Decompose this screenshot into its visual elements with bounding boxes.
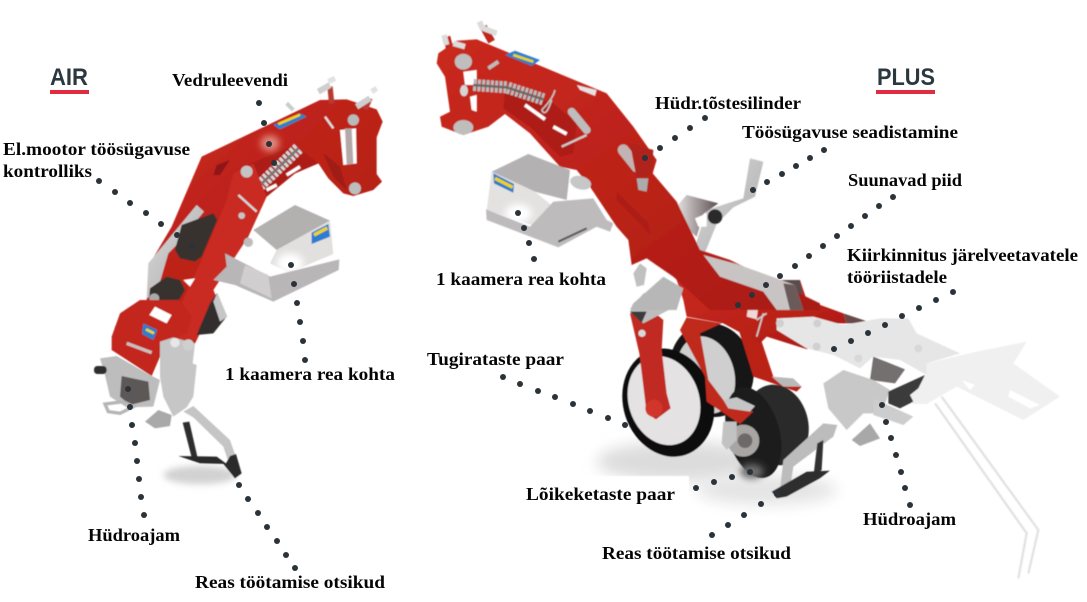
callout: Kiirkinnitus: tööriistadele: [847, 267, 947, 287]
machine: PLUS row unit: [437, 22, 1060, 578]
white rear frame: [777, 317, 960, 375]
callout: 1 kaamera rea kohta (AIR): [225, 262, 395, 384]
heading: PLUS: PLUS: [877, 64, 935, 91]
cutting discs: [737, 379, 816, 471]
callout: Töösügavuse seadistamine: Töösügavuse seadistamine: [742, 122, 958, 142]
callout: Lõikeketaste paar: [526, 469, 753, 504]
leg bracket: [633, 263, 647, 287]
head silver parts: [348, 114, 359, 126]
callout: Vedruleevendi: [172, 70, 288, 166]
ground shadow: [597, 442, 837, 505]
silver pins: [455, 54, 472, 70]
callout: Suunavad piid: Suunavad piid: [848, 170, 962, 190]
callout: Suunavad piid: [735, 170, 962, 308]
callout: Hüdr.tõstesilinder: Hüdr.tõstesilinder: [655, 93, 801, 113]
callout: 1 kaamera rea kohta (PLUS): 1 kaamera rea kohta: [436, 269, 606, 289]
machine: AIR row unit: [94, 78, 383, 484]
callout: 1 kaamera rea kohta (AIR): 1 kaamera rea kohta: [225, 364, 395, 384]
callout: Hüdroajam (AIR): [88, 386, 180, 545]
callout: Reas töötamise otsikud (AIR): Reas töötamise otsikud: [195, 572, 385, 592]
rear bracket: [197, 293, 227, 335]
callout: Töösügavuse seadistamine: [742, 122, 958, 193]
callout: Kiirkinnitus: [831, 245, 1078, 352]
callout: El.mootor: [3, 139, 195, 249]
arm and share: [780, 423, 837, 490]
spring: [473, 85, 543, 99]
callout: Hüdroajam (PLUS): Hüdroajam: [863, 509, 956, 529]
callout: Reas töötamise otsikud (AIR): [195, 482, 385, 592]
callout: Tugirataste paar: Tugirataste paar: [427, 349, 564, 369]
middle red leg: [680, 317, 753, 424]
main red frame: [437, 39, 820, 310]
lower arm and share: [183, 406, 242, 478]
callout: Kiirkinnitus: Kiirkinnitus järelveetavatele: [847, 245, 1078, 265]
callout: Lõikeketaste paar: Lõikeketaste paar: [526, 484, 675, 504]
lower grey mount: [160, 337, 197, 417]
callout: Vedruleevendi: Vedruleevendi: [172, 70, 288, 90]
red tail of beam: [677, 280, 847, 349]
right red leg: [737, 323, 802, 392]
callout: Hüdr.tõstesilinder: [642, 93, 801, 161]
back wheel: [659, 313, 764, 427]
front wheel: [609, 336, 728, 469]
wires: [935, 403, 1027, 578]
camera box: [253, 205, 330, 250]
front red leg: [630, 312, 671, 419]
callout: Hüdroajam (AIR): Hüdroajam: [88, 525, 180, 545]
heading: AIR: AIR: [50, 64, 88, 91]
head windows: [463, 70, 477, 112]
callout: El.mootor: kontrolliks: [3, 161, 92, 181]
callout: 1 kaamera rea kohta (PLUS): [436, 210, 606, 289]
gray plate and motors: [147, 205, 204, 298]
quick coupler arm: [897, 342, 1060, 420]
callout: Tugirataste paar: [427, 349, 628, 428]
spring: [252, 148, 298, 193]
grey tool carrier: [870, 357, 905, 383]
label knock-out: [510, 476, 689, 516]
camera box: [492, 154, 570, 200]
logo: [273, 113, 307, 129]
fitting bases: [447, 27, 492, 50]
lever and sector plate: [695, 158, 763, 257]
callout: Reas töötamise otsikud (PLUS): Reas töötamise otsikud: [602, 543, 791, 563]
lower red block: [112, 300, 192, 376]
callout: Reas töötamise otsikud (PLUS): [602, 491, 791, 563]
upper red frame: [112, 99, 383, 350]
callout: Hüdroajam (PLUS): [863, 402, 956, 529]
logo: [505, 51, 540, 66]
grey inset: [703, 255, 803, 310]
callout: El.mootor: El.mootor töösügavuse: [3, 139, 190, 159]
